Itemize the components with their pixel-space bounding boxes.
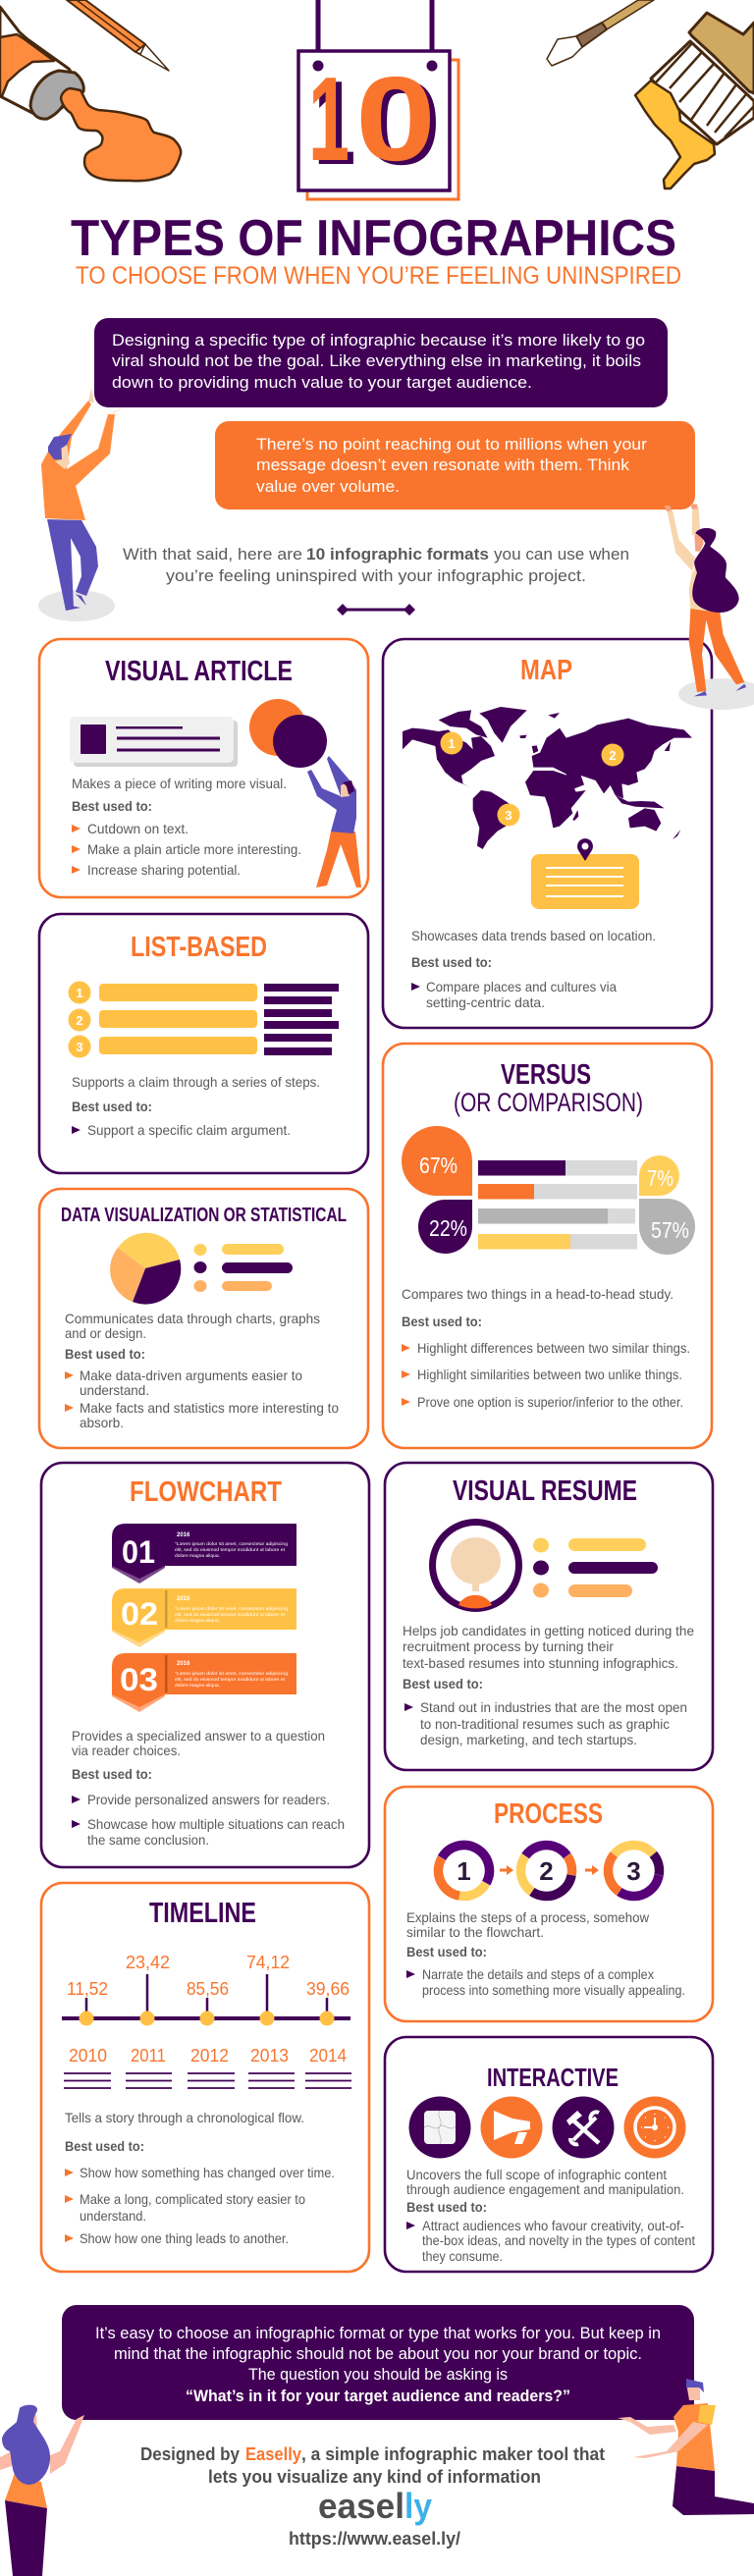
process rings with arrows: 2 xyxy=(539,1856,554,1886)
heading: PROCESS xyxy=(494,1798,603,1830)
icon: clock xyxy=(624,2097,685,2158)
panel: map: Best used to: xyxy=(411,954,492,970)
map pins: 3 xyxy=(505,808,512,823)
icon: puzzle xyxy=(408,2097,471,2158)
ribbon 01: "Lorem ipsum dolor sit amet, consectetur adipiscing xyxy=(175,1541,289,1546)
legend xyxy=(194,1244,293,1292)
number 10: 1 xyxy=(308,52,350,186)
panel: flowchart: Provide personalized answers for readers. xyxy=(87,1792,330,1807)
panel: list-based xyxy=(39,914,368,1173)
timeline chart: 11,52 xyxy=(67,1979,108,1999)
panel: interactive: Best used to: xyxy=(406,2199,487,2215)
callout: purple intro: down to providing much value to your target audience. xyxy=(112,373,532,392)
panel: data visualization: Make facts and statistics more interesting to xyxy=(80,1400,339,1416)
panel: visual article: Best used to: xyxy=(72,798,152,814)
timeline chart: 74,12 xyxy=(246,1953,290,1972)
timeline chart: 2013 xyxy=(250,2046,289,2066)
panel: data visualization: Communicates data through charts, graphs xyxy=(65,1311,320,1326)
comparison drops: 67% xyxy=(419,1153,458,1178)
panel: interactive: through audience engagement and manipulation. xyxy=(406,2181,684,2197)
note card with pin xyxy=(531,838,639,909)
panel: map: Showcases data trends based on location. xyxy=(411,928,656,943)
subheading: (OR COMPARISON) xyxy=(454,1088,643,1117)
logo: easelly: ly xyxy=(404,2486,432,2526)
panel: visual article: Cutdown on text. xyxy=(87,821,188,836)
timeline chart: 23,42 xyxy=(126,1953,170,1972)
callout: purple intro: viral should not be the goal. Like everything else in marketing, it boils xyxy=(112,351,641,370)
panel: visual resume: Helps job candidates in getting noticed during the xyxy=(403,1623,694,1638)
ribbon 01: 2016 xyxy=(177,1532,190,1538)
panel: visual article xyxy=(39,639,368,897)
numbered list graphic: 2 xyxy=(76,1013,83,1028)
callout: orange intro xyxy=(215,421,695,510)
panel: visual article: Makes a piece of writing more visual. xyxy=(72,776,287,791)
logo: easelly: easel xyxy=(318,2486,404,2526)
panel: visual resume: to non-traditional resumes such as graphic xyxy=(420,1716,670,1732)
panel: visual resume: Stand out in industries that are the most open xyxy=(420,1699,687,1715)
text block: lead-in: you can use when xyxy=(494,545,629,564)
comparison bars xyxy=(478,1160,637,1249)
panel: flowchart: Best used to: xyxy=(72,1766,152,1782)
text block: credit: lets you visualize any kind of information xyxy=(208,2467,541,2487)
timeline chart: 2014 xyxy=(309,2046,347,2066)
icon: megaphone xyxy=(481,2097,542,2158)
panel: map: setting-centric data. xyxy=(426,994,545,1010)
ribbon 02: "Lorem ipsum dolor sit amet, consectetur adipiscing xyxy=(175,1606,289,1611)
map pins: 2 xyxy=(609,748,617,763)
map pins xyxy=(440,732,624,827)
heading: VERSUS xyxy=(501,1059,591,1091)
circles xyxy=(249,699,327,768)
number 10 shadow xyxy=(314,56,442,189)
panel: list-based: Supports a claim through a series of steps. xyxy=(72,1074,320,1090)
panel: map: Compare places and cultures via xyxy=(426,979,617,994)
panel: timeline: Show how one thing leads to another. xyxy=(80,2230,289,2246)
text block: credit: Easelly xyxy=(245,2444,301,2464)
ribbon 03: 03 xyxy=(120,1662,158,1697)
calendar with number 10 xyxy=(298,0,458,199)
comparison drops: 22% xyxy=(429,1215,467,1241)
comparison drops: 57% xyxy=(651,1217,689,1243)
ribbon 03: elit, sed do eiusmod tempor incididunt ut labore et xyxy=(175,1677,286,1682)
panel: interactive: Attract audiences who favour creativity, out-of- xyxy=(422,2218,684,2233)
panel: list-based: Support a specific claim argument. xyxy=(87,1122,291,1138)
panel: visual article: Make a plain article more interesting. xyxy=(87,841,301,857)
panel: visual resume: Best used to: xyxy=(403,1676,483,1691)
ribbon 02: dolore magna aliqua. xyxy=(175,1618,220,1623)
ribbon 02 xyxy=(112,1588,296,1647)
text block: credit: , a simple infographic maker tool that xyxy=(301,2444,605,2464)
panel: data visualization: understand. xyxy=(80,1382,149,1398)
panel: visual resume: recruitment process by turning their xyxy=(403,1638,614,1654)
text block: lead-in: 10 infographic formats xyxy=(306,545,489,564)
heading: FLOWCHART xyxy=(130,1476,282,1508)
illustration: man with closing box xyxy=(618,2379,754,2515)
timeline chart: 85,56 xyxy=(187,1979,229,1999)
legend xyxy=(533,1537,658,1598)
text block: credit: Designed by xyxy=(140,2444,240,2464)
text block: lead-in: you’re feeling uninspired with your infographic project. xyxy=(166,566,586,585)
panel: versus: Highlight similarities between two unlike things. xyxy=(417,1367,682,1382)
process rings with arrows: 3 xyxy=(626,1856,641,1886)
panel: flowchart: Showcase how multiple situations can reach xyxy=(87,1816,345,1832)
avatar xyxy=(432,1522,518,1608)
callout: purple intro: Designing a specific type of infographic because it’s more likely to go xyxy=(112,331,645,349)
callout: closing question: The question you should be asking is xyxy=(248,2365,508,2384)
text block: lead-in xyxy=(123,545,629,585)
icon: tools xyxy=(552,2097,615,2158)
panel: data visualization: absorb. xyxy=(80,1415,124,1430)
heading: DATA VISUALIZATION OR STATISTICAL xyxy=(61,1205,347,1226)
illustration: woman lifting orange box xyxy=(665,504,754,710)
timeline chart: 39,66 xyxy=(306,1979,350,1999)
subtitle: TO CHOOSE FROM WHEN YOU’RE FEELING UNINSPIRED xyxy=(76,262,681,290)
article card graphic xyxy=(70,717,238,767)
ribbon 03 xyxy=(112,1653,296,1712)
ribbon 01 xyxy=(112,1524,296,1583)
ribbon 01: 01 xyxy=(122,1534,155,1570)
panel: visual article: Increase sharing potential. xyxy=(87,862,241,878)
callout: closing question: mind that the infographic should not be about you nor your brand or topic. xyxy=(114,2344,642,2363)
numbered list graphic xyxy=(69,982,339,1058)
comparison drops xyxy=(402,1126,695,1255)
text block: credit xyxy=(140,2444,605,2487)
panel: timeline: Show how something has changed over time. xyxy=(80,2165,335,2180)
panel: timeline: understand. xyxy=(80,2208,146,2224)
ribbon 03: 2016 xyxy=(177,1661,190,1667)
panel: versus: Prove one option is superior/inferior to the other. xyxy=(417,1394,683,1410)
process rings with arrows xyxy=(429,1835,670,1906)
text block: lead-in: With that said, here are xyxy=(123,545,302,564)
ribbon 02: 2016 xyxy=(177,1596,190,1602)
callout: purple intro xyxy=(94,318,668,407)
illustration: woman with closing box xyxy=(0,2405,84,2576)
panel: timeline: Best used to: xyxy=(65,2138,144,2154)
heading: TIMELINE xyxy=(149,1898,256,1929)
numbered list graphic: 3 xyxy=(76,1040,83,1054)
ribbon 02: 02 xyxy=(121,1596,158,1632)
world map xyxy=(403,707,692,849)
ribbon 02: elit, sed do eiusmod tempor incididunt ut labore et xyxy=(175,1612,286,1617)
panel: list-based: Best used to: xyxy=(72,1099,152,1114)
panel: process: Best used to: xyxy=(406,1944,487,1959)
panel: data visualization: and or design. xyxy=(65,1325,146,1341)
panel: process: Narrate the details and steps of a complex xyxy=(422,1966,654,1982)
comparison drops: 7% xyxy=(647,1165,673,1191)
heading: VISUAL RESUME xyxy=(453,1476,637,1507)
person holding circle xyxy=(307,756,361,887)
illustration: paint tube and pencil xyxy=(0,0,181,181)
timeline chart: 2012 xyxy=(190,2046,229,2066)
ribbon 01: dolore magna aliqua. xyxy=(175,1553,220,1558)
ribbon 03: dolore magna aliqua. xyxy=(175,1683,220,1688)
panel: timeline: Tells a story through a chronological flow. xyxy=(65,2110,304,2125)
panel: interactive: Uncovers the full scope of infographic content xyxy=(406,2167,667,2182)
illustration: pen and paint brush xyxy=(547,0,754,188)
number 10 xyxy=(308,52,436,186)
number 10 shadow: 0 xyxy=(361,56,442,189)
panel: map xyxy=(383,639,712,1028)
callout: orange intro: message doesn’t even resonate with them. Think xyxy=(256,456,630,474)
callout: orange intro: value over volume. xyxy=(256,477,400,496)
panel: flowchart: the same conclusion. xyxy=(87,1832,209,1848)
timeline chart: 2010 xyxy=(69,2046,107,2066)
heading: VISUAL ARTICLE xyxy=(105,656,293,687)
timeline chart: 2011 xyxy=(131,2046,166,2066)
number 10 shadow: 1 xyxy=(314,56,355,189)
url: https://www.easel.ly/ xyxy=(289,2529,460,2549)
panel: flowchart: Provides a specialized answer to a question xyxy=(72,1728,325,1744)
panel: visual resume xyxy=(385,1463,713,1770)
number 10: 0 xyxy=(355,52,436,186)
panel: visual resume: design, marketing, and tech startups. xyxy=(420,1732,637,1747)
panel: visual resume: text-based resumes into stunning infographics. xyxy=(403,1655,678,1671)
panel: interactive xyxy=(385,2037,713,2272)
panel: interactive: they consume. xyxy=(422,2248,503,2264)
callout: closing question: “What’s in it for your target audience and readers?” xyxy=(186,2387,570,2405)
panel: timeline: Make a long, complicated story easier to xyxy=(80,2191,305,2207)
panel: process: similar to the flowchart. xyxy=(406,1924,544,1940)
callout: closing question xyxy=(62,2305,694,2420)
title: TYPES OF INFOGRAPHICS xyxy=(71,210,676,267)
heading: LIST-BASED xyxy=(131,932,267,963)
process rings with arrows: 1 xyxy=(457,1856,471,1886)
numbered list graphic: 1 xyxy=(76,986,83,1000)
divider xyxy=(337,604,415,616)
heading: MAP xyxy=(520,655,572,686)
timeline chart xyxy=(62,1953,351,2088)
panel: versus: Compares two things in a head-to-head study. xyxy=(402,1286,673,1302)
panel: versus xyxy=(383,1044,712,1448)
callout: closing question: It’s easy to choose an infographic format or type that works for you. But keep in xyxy=(95,2324,661,2342)
panel: process: process into something more visually appealing. xyxy=(422,1982,685,1998)
panel: data visualization: Make data-driven arguments easier to xyxy=(80,1368,302,1383)
pie chart xyxy=(110,1233,181,1305)
panel: interactive: the-box ideas, and novelty in the types of content xyxy=(422,2232,695,2248)
map pins: 1 xyxy=(448,736,456,751)
panel: data visualization: Best used to: xyxy=(65,1346,145,1362)
panel: process: Explains the steps of a process, somehow xyxy=(406,1909,650,1925)
panel: timeline xyxy=(41,1883,369,2272)
panel: flowchart xyxy=(41,1463,369,1867)
callout: orange intro: There’s no point reaching out to millions when your xyxy=(256,435,647,454)
panel: data visualization xyxy=(39,1189,368,1448)
panel: process xyxy=(385,1787,713,2021)
ribbon 03: "Lorem ipsum dolor sit amet, consectetur adipiscing xyxy=(175,1671,289,1676)
panel: flowchart: via reader choices. xyxy=(72,1743,181,1758)
panel: versus: Best used to: xyxy=(402,1314,482,1329)
panel: versus: Highlight differences between two similar things. xyxy=(417,1340,690,1356)
heading: INTERACTIVE xyxy=(487,2063,619,2092)
ribbon 01: elit, sed do eiusmod tempor incididunt ut labore et xyxy=(175,1547,286,1552)
illustration: man lifting purple box xyxy=(38,388,125,621)
